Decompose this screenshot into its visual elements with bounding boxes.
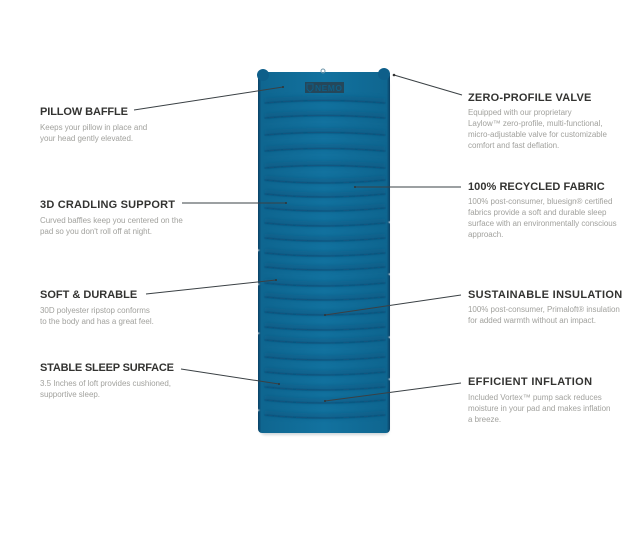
callout: efficient inflation: Included Vortex™ pump sack reduces: [468, 393, 602, 402]
callout: sustainable insulation: [468, 289, 623, 325]
callout: soft and durable: [40, 289, 154, 326]
callout: recycled fabric: fabrics provide a soft and durable sleep: [468, 208, 606, 217]
callout: stable sleep surface: supportive sleep.: [40, 390, 100, 399]
callout: pillow baffle: your head gently elevated.: [40, 134, 133, 143]
callout: soft and durable: to the body and has a great feel.: [40, 317, 154, 326]
baffle shading: [265, 98, 385, 416]
callout: pillow baffle: [40, 106, 147, 143]
callout: stable sleep surface: 3.5 Inches of loft provides cushioned,: [40, 379, 171, 388]
callout: sustainable insulation: SUSTAINABLE INSULATION: [468, 289, 623, 301]
callout: efficient inflation: [468, 376, 610, 424]
callout: soft and durable: SOFT & DURABLE: [40, 289, 137, 301]
callout: zero-profile valve: Equipped with our proprietary: [468, 108, 572, 117]
callout: zero-profile valve: ZERO-PROFILE VALVE: [468, 92, 592, 104]
callout: soft and durable: 30D polyester ripstop conforms: [40, 306, 150, 315]
baffle seams: [265, 100, 385, 418]
callout: zero-profile valve: Laylow™ zero-profile, multi-functional,: [468, 119, 602, 128]
callout: recycled fabric: approach.: [468, 230, 503, 239]
callout: zero-profile valve: comfort and fast deflation.: [468, 141, 559, 150]
callout: pillow baffle: Keeps your pillow in place and: [40, 123, 147, 132]
callout: 3D cradling support: Curved baffles keep you centered on the: [40, 216, 183, 225]
callout: efficient inflation: moisture in your pad and makes inflation: [468, 404, 610, 413]
callout: efficient inflation: a breeze.: [468, 415, 501, 424]
callout: pillow baffle: PILLOW BAFFLE: [40, 106, 128, 118]
callout: 3D cradling support: 3D CRADLING SUPPORT: [40, 199, 175, 211]
icon: logo badge: NEMO: [315, 83, 342, 93]
callout: zero-profile valve: [468, 92, 607, 150]
callout: efficient inflation: EFFICIENT INFLATION: [468, 376, 592, 388]
callout: recycled fabric: surface with an environmentally conscious: [468, 219, 617, 228]
callout: recycled fabric: [468, 181, 617, 239]
callout: sustainable insulation: 100% post-consumer, Primaloft® insulation: [468, 305, 620, 314]
callout: recycled fabric: 100% RECYCLED FABRIC: [468, 181, 605, 193]
icon: logo badge: [305, 82, 344, 93]
callout: sustainable insulation: for added warmth without an impact.: [468, 316, 596, 325]
callout: stable sleep surface: STABLE SLEEP SURFACE: [40, 362, 174, 374]
callout: 3D cradling support: pad so you don't roll off at night.: [40, 227, 152, 236]
callout: zero-profile valve: micro-adjustable valve for customizable: [468, 130, 607, 139]
callout: 3D cradling support: [40, 199, 183, 236]
callout: stable sleep surface: [40, 362, 174, 399]
callout: recycled fabric: 100% post-consumer, bluesign® certified: [468, 197, 612, 206]
